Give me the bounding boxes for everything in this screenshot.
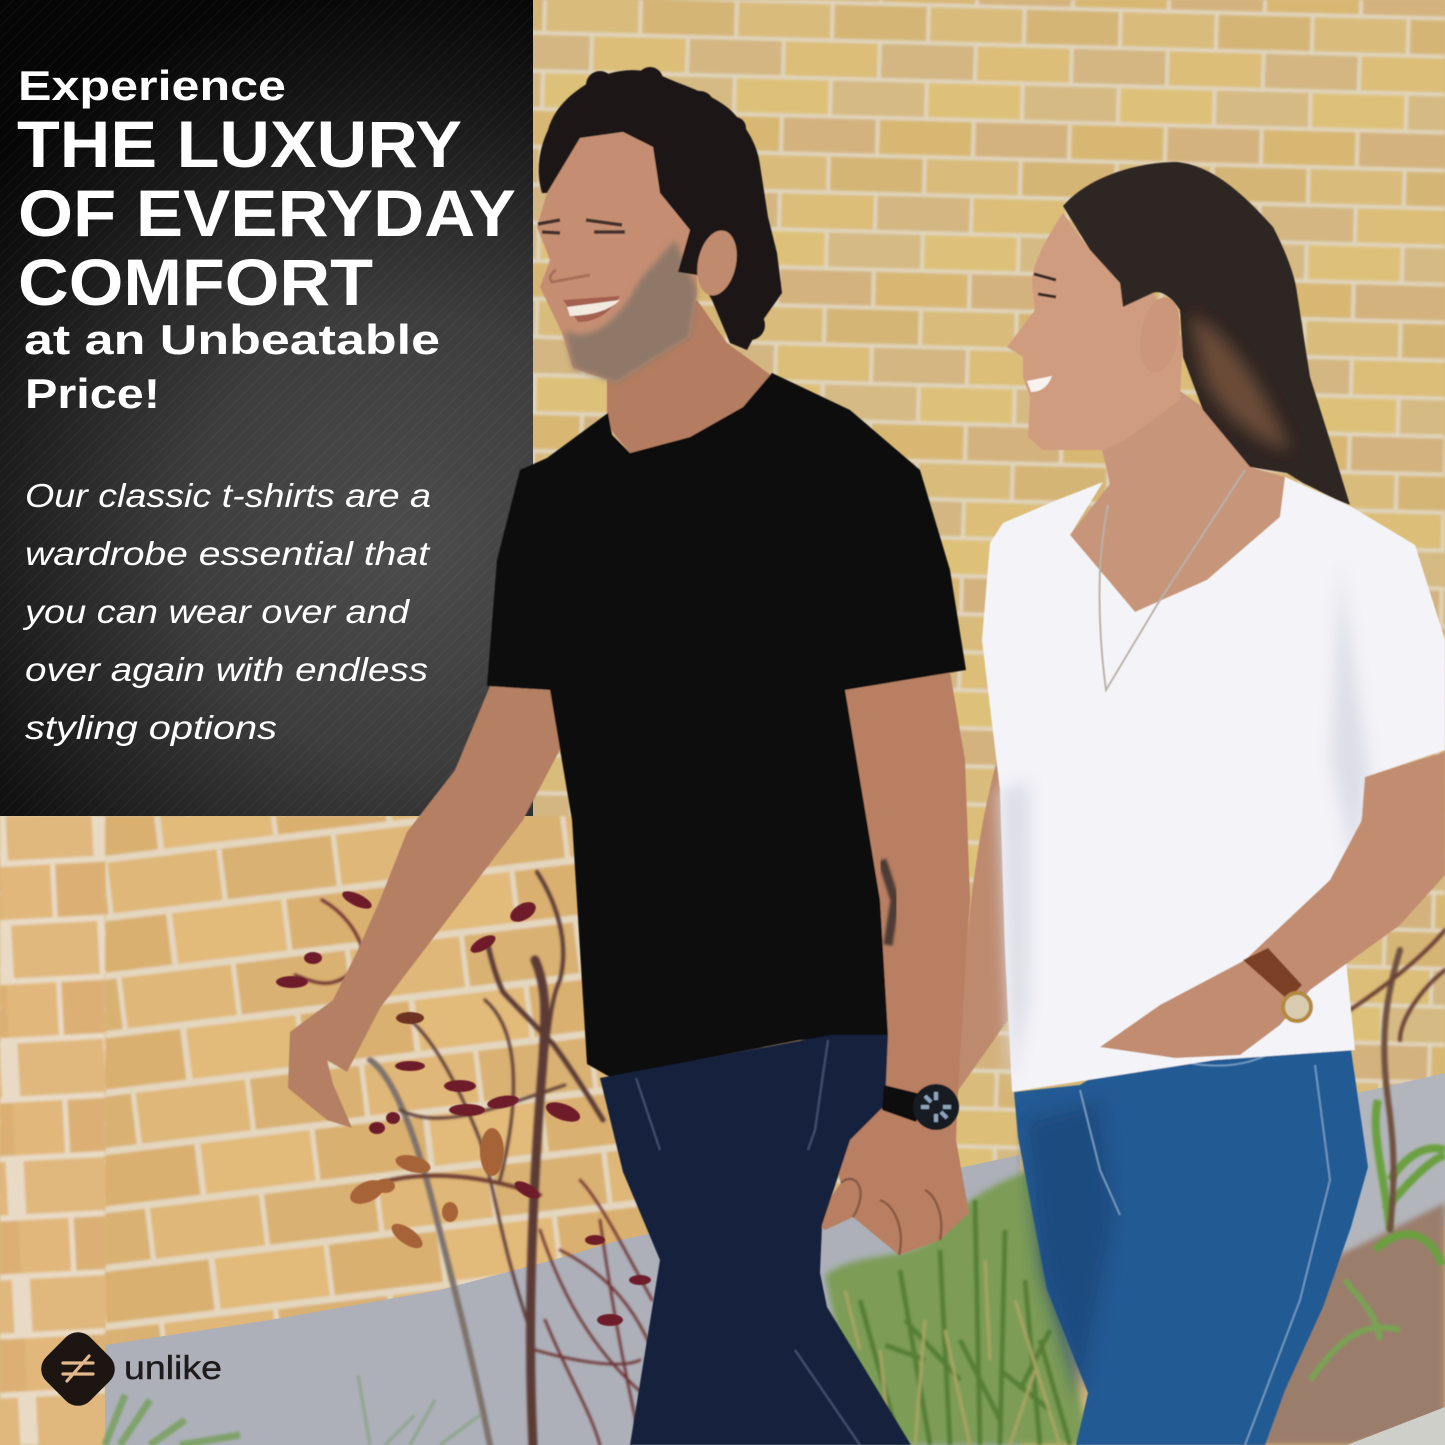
plant: red shrub	[276, 872, 1445, 1445]
text block: description: you can wear over and	[23, 593, 411, 630]
man: jeans stitching	[636, 1040, 860, 1445]
heading: main title: THE LUXURY	[17, 107, 462, 181]
icon: not-equal badge	[34, 1325, 122, 1413]
man: jeans	[600, 1035, 911, 1445]
text block: description: styling options	[25, 709, 277, 746]
man: mouth	[563, 296, 620, 322]
text block: description: Our classic t-shirts are a	[25, 477, 431, 514]
text block: description: wardrobe essential that	[25, 535, 431, 572]
heading: experience: Experience	[18, 62, 286, 109]
heading: price line: Price!	[25, 370, 160, 417]
woman: smile	[1027, 376, 1052, 392]
woman: face	[1007, 213, 1183, 450]
text block: description: over again with endless	[25, 651, 428, 688]
woman: white t-shirt	[982, 477, 1445, 1092]
woman: necklace	[1099, 470, 1245, 690]
man: eyes and brows	[538, 220, 625, 233]
man: black t-shirt	[487, 373, 966, 1077]
heading: main title: OF EVERYDAY	[18, 176, 516, 250]
logo: unlike	[34, 1325, 222, 1413]
man: hair	[539, 70, 782, 350]
background: lower left brick wall	[105, 816, 825, 1376]
plant: red leaves	[276, 888, 651, 1326]
background: grey wall base	[105, 1073, 1445, 1445]
man: nose	[550, 270, 590, 282]
heading: price line	[24, 316, 440, 417]
background: mulch and pavement	[1240, 1203, 1445, 1445]
man: arm on viewer's right	[814, 672, 970, 1255]
man: finger lines	[841, 1179, 941, 1255]
plant: brown leaves	[346, 1128, 504, 1253]
woman: eye and brow	[1034, 274, 1056, 297]
woman: ear	[1135, 294, 1185, 376]
woman: wrist watch	[1243, 948, 1311, 1021]
person: woman walking	[955, 162, 1445, 1445]
background: left brick strip	[0, 816, 105, 1445]
woman: necklace over shirt	[1099, 570, 1160, 690]
man: ear	[692, 227, 742, 299]
heading: main title: COMFORT	[18, 245, 373, 319]
man: wrist watch	[882, 1084, 959, 1130]
woman: forearm and hand	[1100, 752, 1445, 1058]
woman: jeans	[1014, 1040, 1368, 1445]
man: stubble	[565, 240, 697, 383]
man: hair curls	[586, 67, 781, 340]
logo wordmark: unlike	[124, 1349, 222, 1386]
man: face	[537, 132, 697, 383]
man: tattoo	[882, 860, 895, 945]
woman: neck and chest	[1070, 370, 1285, 612]
man: neck	[607, 300, 772, 453]
woman: jeans stitching	[1080, 1045, 1330, 1445]
man: arm on viewer's left	[288, 686, 565, 1128]
person: man walking	[288, 67, 970, 1445]
heading: price line: at an Unbeatable	[24, 316, 440, 363]
woman: shirt shading	[1000, 560, 1370, 1090]
text block: description	[23, 477, 431, 746]
panel: headline card	[0, 0, 533, 816]
woman: hair highlights	[1190, 315, 1290, 450]
heading: main title	[17, 107, 516, 319]
woman: jeans shading	[1025, 1100, 1115, 1400]
woman: hair	[1063, 162, 1350, 505]
woman: arm on viewer's left	[955, 750, 1008, 1095]
plant: green grass	[105, 1100, 1445, 1445]
